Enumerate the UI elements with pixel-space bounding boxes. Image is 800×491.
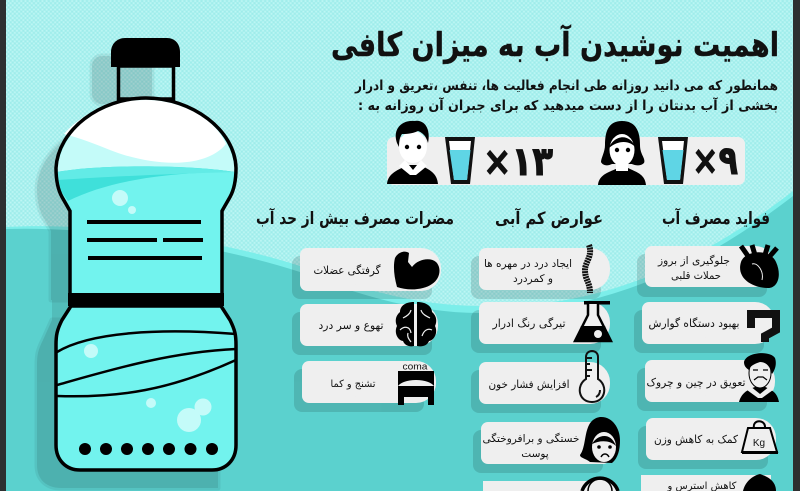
card: blood pressure: افزایش فشار خون [488,378,570,391]
icon: coma bed [398,362,434,405]
panel: dehydration symptoms [479,245,620,491]
icon: old man [739,353,779,402]
card: back pain: ایجاد درد در مهره ها [484,258,572,270]
bottle lower body [56,306,236,470]
column heading: overuse harms: مضرات مصرف بیش از حد آب [256,207,454,229]
card: dark urine [479,302,610,344]
column heading: benefits: فواید مصرف آب [662,207,770,229]
card: dark urine: تیرگی رنگ ادرار [492,317,566,330]
icon: clock [582,478,618,491]
icon: heart [740,245,779,288]
card: nausea and headache [300,304,438,346]
intro paragraph: بخشی از آب بدنتان را از دست میدهید که برای جبران آن روزانه به : [358,97,778,114]
icon: woman [598,121,646,185]
card: heart protection: جلوگیری از بروز [657,254,730,267]
icon: stress hand [743,474,776,491]
daily water intake strip [387,121,745,185]
card: delayed wrinkles [645,360,775,402]
bottle band [68,293,224,306]
icon: coma bed: coma [402,362,428,372]
icon: muscle [394,252,439,289]
water bottle [56,38,236,470]
bottle cap [111,38,180,67]
card: weight loss [646,418,776,460]
card: nausea and headache: تهوع و سر درد [318,319,384,332]
card: stress reduction [641,475,771,491]
icon: intestine [751,314,776,342]
card: fatigue and flushed skin: خستگی و برافروختگی [482,432,580,445]
panel: overuse harms [300,248,441,405]
bottle shadow [37,56,218,488]
card: digestion: بهبود دستگاه گوارش [648,317,740,330]
card: heart protection: حملات قلبی [671,270,721,282]
count: women: ×۹ [692,138,738,184]
icon: kettlebell weight [742,421,778,454]
card: back pain [479,248,610,290]
icon: spine [585,245,590,293]
card: blood pressure [479,362,610,404]
panel: benefits [641,245,779,491]
icon: kettlebell weight: Kg [753,438,765,449]
icon: glass man [445,137,475,184]
icon: man [387,121,438,184]
card: weight loss: کمک به کاهش وزن [654,433,739,446]
card shadows [292,254,768,473]
card: back pain: و کمردرد [513,273,553,285]
bottle upper body [56,98,236,295]
icon: tired woman [580,417,620,463]
right dark edge [793,0,800,491]
count: men: ×۱۳ [483,139,553,185]
card: seizure and coma [302,361,436,403]
card: fatigue and flushed skin [481,422,610,464]
card: seizure and coma: تشنج و کما [330,379,376,390]
icon: brain [396,302,436,346]
card: delayed wrinkles: تعویق در چین و چروک [646,376,746,390]
card: muscle cramps: گرفتگی عضلات [314,264,381,277]
bottle label lines [87,220,203,260]
card: fatigue and flushed skin: پوست [521,448,549,460]
lower teal wave [6,191,793,491]
bottle neck [118,66,174,99]
card: heart protection [645,246,775,287]
card: cut-off card [483,481,608,491]
icon: glass woman [658,137,688,184]
column heading: dehydration symptoms: عوارض کم آبی [495,207,603,229]
intro paragraph [354,78,778,114]
card: digestion [642,302,775,344]
icon: thermometer [580,351,604,402]
card: muscle cramps [300,248,441,291]
icon: flask [575,301,611,341]
